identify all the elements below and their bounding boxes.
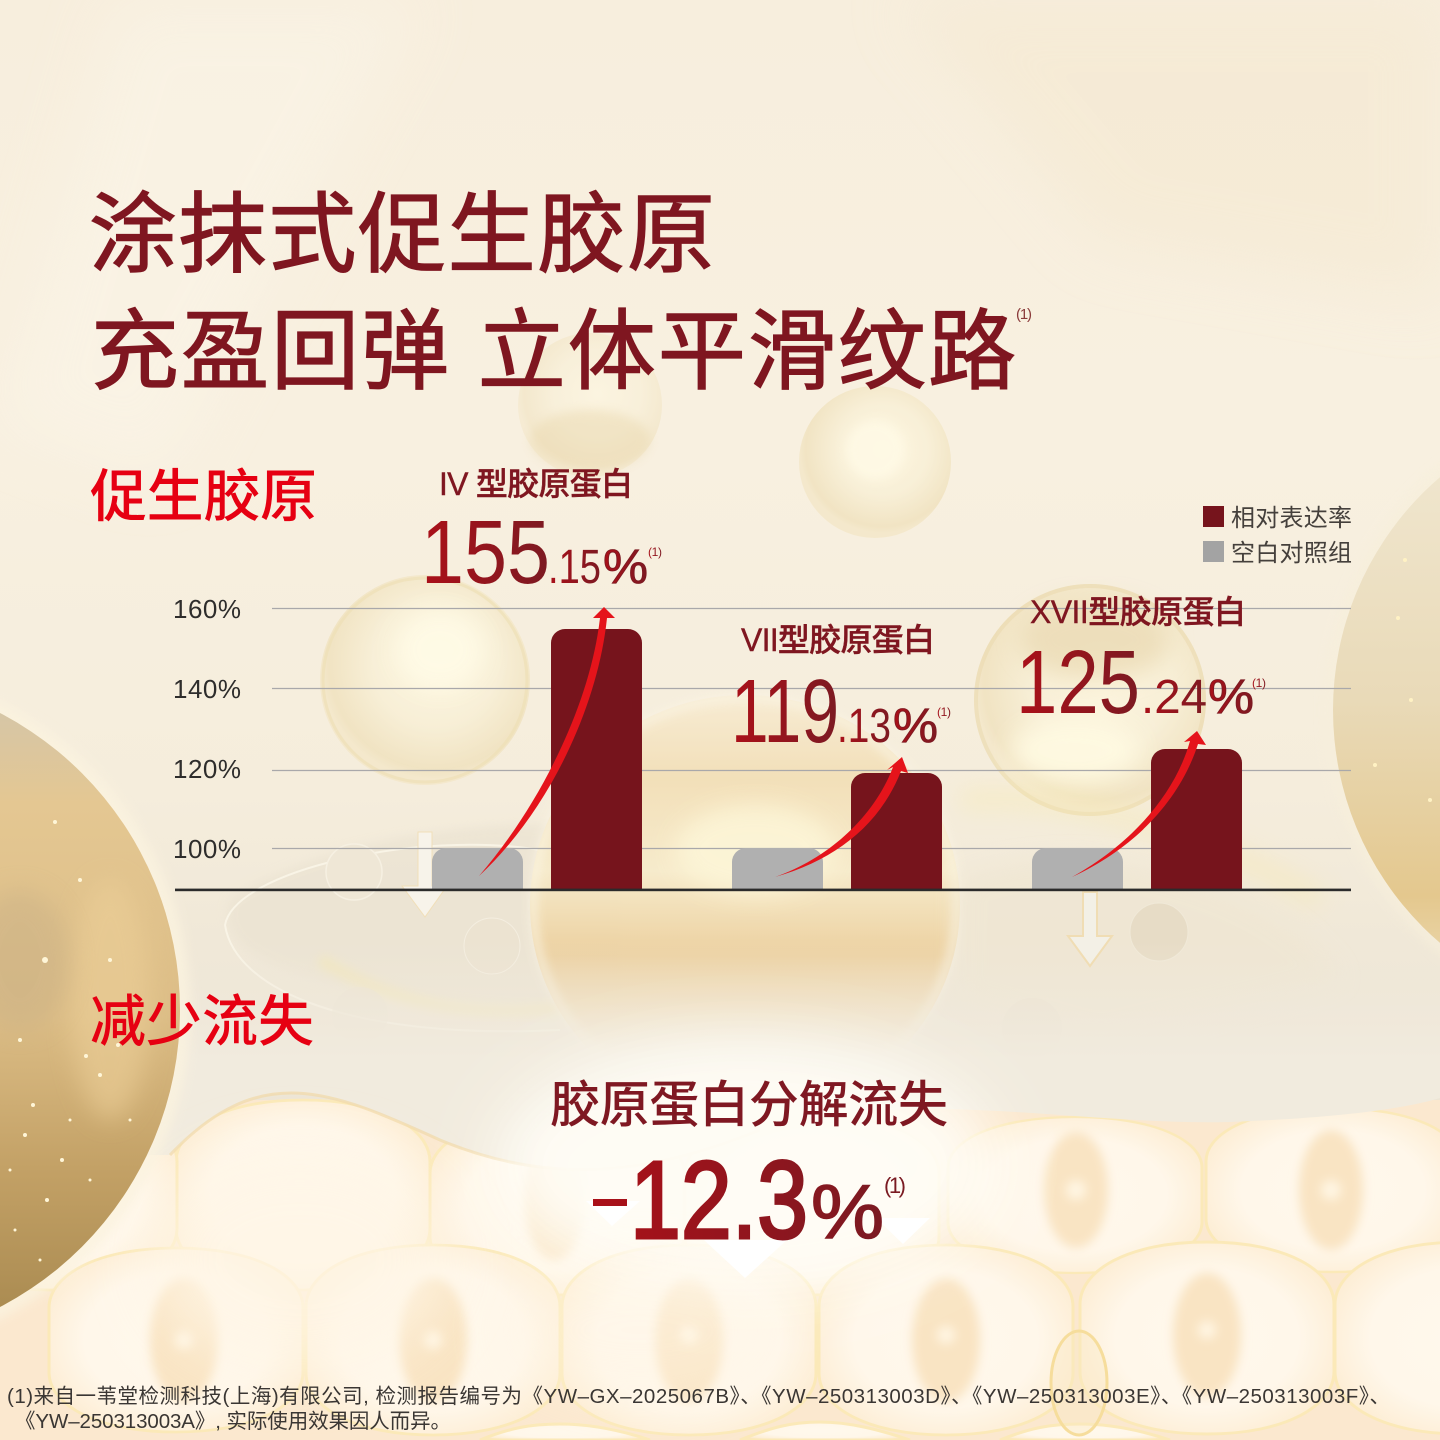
y axis labels: 160% — [173, 594, 241, 624]
icon: white down arrow under XVII bar — [1068, 892, 1112, 966]
icon: white down arrow right — [876, 1218, 930, 1244]
value: 119.13%: (1) — [937, 705, 951, 719]
bars: XVII control and expression — [1032, 749, 1242, 889]
title — [89, 185, 1032, 401]
y axis labels: 140% — [173, 674, 241, 704]
callout: type IV collagen — [421, 466, 662, 603]
callout: type VII collagen — [731, 622, 951, 762]
title footnote mark: (1) — [1016, 306, 1032, 323]
value: -12.3%: (1) — [884, 1173, 906, 1198]
y axis labels: 120% — [173, 754, 241, 784]
footnote — [7, 1385, 1390, 1433]
legend label: relative expression: 相对表达率 — [1231, 505, 1352, 532]
icon: white down arrow left — [586, 1201, 640, 1226]
callout: type XVII collagen — [1016, 594, 1266, 733]
bars: IV control and expression — [432, 629, 642, 889]
value: 125.24% — [1016, 633, 1266, 733]
value: 125.24%: (1) — [1252, 676, 1266, 690]
footnote line 2: 《YW–250313003A》, 实际使用效果因人而异。 — [15, 1410, 451, 1433]
value: 119.13% — [731, 662, 951, 762]
arrow: XVII growth — [1072, 731, 1206, 877]
value: -12.3% — [593, 1139, 906, 1262]
value: 125.24%: 125 — [1016, 633, 1140, 733]
value: 155.15%: 155 — [421, 503, 550, 603]
value: -12.3%: 12.3 — [630, 1139, 808, 1262]
legend — [1203, 505, 1352, 567]
value: 155.15%: .15 — [548, 541, 601, 594]
icon: white down arrow center bottom — [704, 1240, 787, 1278]
legend swatch: relative expression — [1203, 506, 1224, 527]
footnote line 1: (1)来自一苇堂检测科技(上海)有限公司, 检测报告编号为《YW–GX–2025067B》、《YW–250313003D》、《YW–250313003E》、《YW–250313003F》、 — [7, 1385, 1390, 1408]
sub heading: collagen breakdown loss: 胶原蛋白分解流失 — [550, 1077, 948, 1133]
label: type XVII: XVII型胶原蛋白 — [1030, 594, 1246, 630]
value: 125.24%: .24 — [1141, 671, 1207, 724]
value: 119.13%: % — [893, 700, 938, 753]
value: 119.13%: 119 — [731, 662, 839, 762]
bar chart — [173, 594, 1351, 891]
icon: white down arrow behind first chart bar — [402, 832, 447, 917]
title line 1: 涂抹式促生胶原 — [89, 185, 715, 284]
arrow: VII growth — [775, 757, 908, 877]
bars: VII control and expression — [732, 773, 942, 889]
section heading: reduce loss: 减少流失 — [90, 990, 314, 1053]
y axis labels — [173, 594, 241, 864]
label: type VII: VII型胶原蛋白 — [741, 622, 935, 658]
y axis labels: 100% — [173, 834, 241, 864]
arrow: IV growth — [479, 607, 615, 876]
value: 155.15% — [421, 503, 662, 603]
value: 119.13%: .13 — [837, 700, 891, 753]
value: 155.15%: (1) — [648, 545, 662, 559]
value: -12.3%: % — [811, 1170, 884, 1255]
legend swatch: blank control — [1203, 541, 1224, 562]
value: 155.15%: % — [603, 541, 648, 594]
value: 125.24%: % — [1208, 671, 1254, 724]
legend label: blank control: 空白对照组 — [1231, 540, 1352, 567]
label: type IV: IV 型胶原蛋白 — [439, 466, 633, 502]
title line 2: 充盈回弹 立体平滑纹路 — [91, 302, 1016, 401]
section heading: promote collagen: 促生胶原 — [90, 465, 317, 529]
